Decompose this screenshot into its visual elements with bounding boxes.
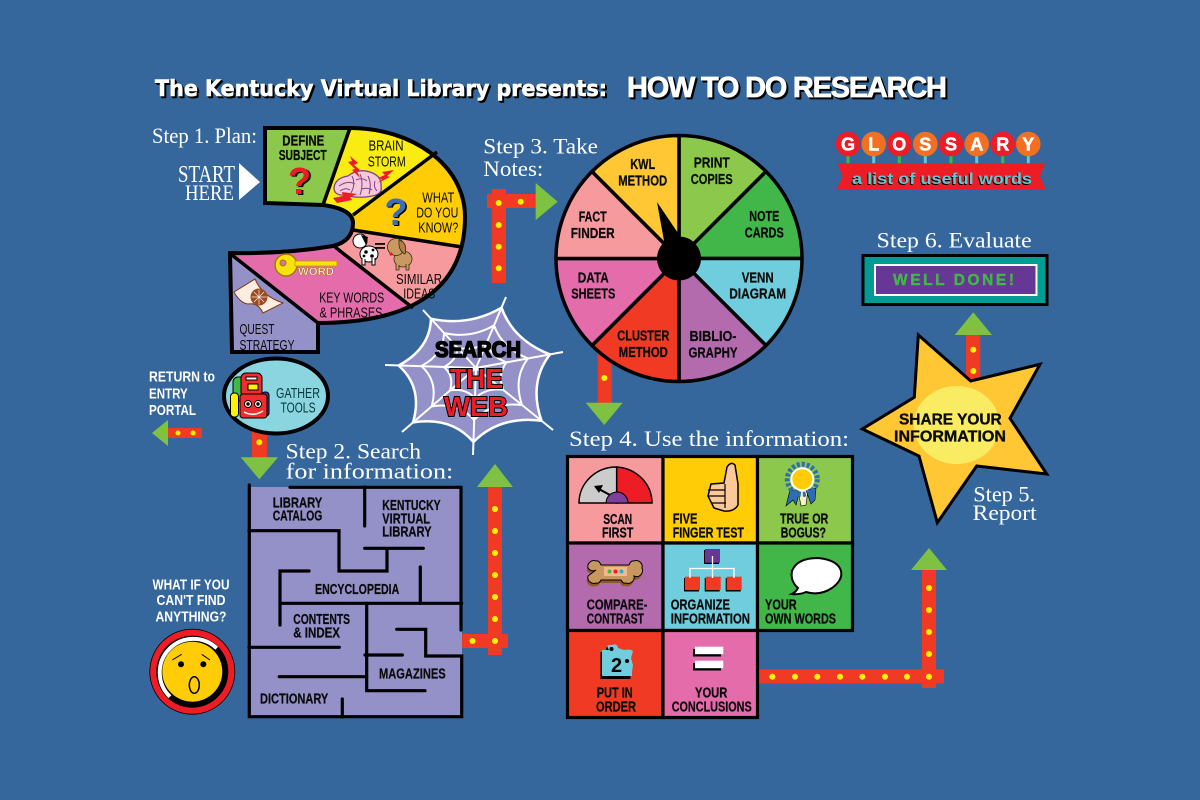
wheel labels: KWL xyxy=(630,157,655,173)
define subject: DEFINE xyxy=(282,133,325,149)
wheel labels: FACT xyxy=(579,209,607,225)
icon: worried face xyxy=(150,629,235,714)
icon: key xyxy=(275,254,337,278)
define subject: SUBJECT xyxy=(279,148,327,164)
maze labels: LIBRARY xyxy=(382,525,432,541)
icon: backpack xyxy=(230,373,269,418)
label: return to entry portal: PORTAL xyxy=(149,403,196,419)
icon: blue question mark: ? xyxy=(386,193,409,235)
key words and phrases xyxy=(319,290,384,322)
wheel labels: SHEETS xyxy=(571,287,616,303)
heading: step 1 plan: Step 1. Plan: xyxy=(152,123,257,148)
scan first: FIRST xyxy=(602,525,633,541)
heading: step 3 take notes xyxy=(483,133,598,181)
label: gather tools xyxy=(276,386,320,417)
similar ideas: SIMILAR xyxy=(396,272,442,288)
arrow: start xyxy=(239,163,260,200)
start here label: START xyxy=(178,162,235,188)
wheel labels: DIAGRAM xyxy=(729,287,786,303)
your conclusions: CONCLUSIONS xyxy=(672,700,752,716)
brain storm xyxy=(368,139,406,171)
icon: puzzle piece: 2 xyxy=(611,655,622,677)
icon: glossary banner: R xyxy=(996,134,1009,154)
heading: step 5 report xyxy=(973,482,1037,525)
icon: glossary banner: Y xyxy=(1022,134,1034,154)
your conclusions: YOUR xyxy=(695,686,728,702)
panel: well done xyxy=(863,256,1047,304)
label: what if you can't find anything: ANYTHING? xyxy=(156,610,227,626)
compare contrast: COMPARE- xyxy=(587,597,648,613)
your own words: YOUR xyxy=(765,597,797,613)
true or bogus: TRUE OR xyxy=(780,511,829,527)
icon: glossary banner: O xyxy=(892,134,906,154)
arrow: share to evaluate xyxy=(955,312,992,385)
maze labels: ENCYCLOPEDIA xyxy=(315,582,400,598)
label: gather tools: TOOLS xyxy=(280,401,316,417)
icon: glossary banner: A xyxy=(970,134,983,154)
icon: search the web xyxy=(385,297,563,455)
arrow: to take notes xyxy=(487,183,558,283)
arrow: gather tools to search xyxy=(241,430,278,479)
heading: step 3 take notes: Notes: xyxy=(483,156,543,181)
maze labels: LIBRARY xyxy=(273,495,323,511)
maze labels: CATALOG xyxy=(273,509,322,525)
icon: glossary banner: a list of useful words xyxy=(852,171,1032,188)
what do you know: KNOW? xyxy=(418,220,458,236)
organize information: ORGANIZE xyxy=(671,597,730,613)
arrow: return to portal xyxy=(152,420,202,446)
icon: glossary banner: S xyxy=(919,134,931,154)
label: what if you can't find anything: CAN'T FIND xyxy=(156,593,226,609)
your own words: OWN WORDS xyxy=(765,611,836,627)
label: gather tools: GATHER xyxy=(276,386,320,402)
heading: step 5 report: Report xyxy=(973,500,1037,525)
your conclusions xyxy=(672,686,752,716)
icon: blue question mark: ? xyxy=(384,192,408,234)
start here label: HERE xyxy=(185,180,234,205)
what do you know xyxy=(416,190,458,236)
wheel labels: COPIES xyxy=(691,172,733,188)
title: HOW TO DO RESEARCH xyxy=(627,72,947,104)
wheel labels: BIBLIO- xyxy=(690,329,737,345)
heading: step 2 search xyxy=(286,438,453,483)
wheel labels: METHOD xyxy=(619,345,668,361)
label: return to entry portal: RETURN to xyxy=(149,370,215,386)
icon: org chart xyxy=(684,549,742,592)
five finger test: FIVE xyxy=(673,511,698,527)
panel: use the information grid xyxy=(568,456,852,718)
panel: search maze xyxy=(249,485,462,717)
compare contrast xyxy=(587,597,648,627)
similar ideas xyxy=(396,272,442,302)
title xyxy=(155,72,947,104)
label: what if you can't find anything xyxy=(152,577,230,626)
what do you know: WHAT xyxy=(422,190,454,206)
panel: share your information star: INFORMATION xyxy=(894,429,1006,446)
true or bogus xyxy=(780,511,829,541)
icon: thumbs up xyxy=(708,463,738,511)
wheel labels: GRAPHY xyxy=(688,345,738,361)
arrow: wheel to use information xyxy=(586,350,623,425)
organize information xyxy=(671,597,750,627)
quest strategy: QUEST xyxy=(240,322,275,338)
wheel labels: DATA xyxy=(578,270,609,286)
icon: key: WORD xyxy=(298,266,334,278)
wheel labels: CARDS xyxy=(745,225,784,241)
label: return to entry portal: ENTRY xyxy=(149,386,188,402)
scan first: SCAN xyxy=(603,512,632,528)
panel: plan track xyxy=(228,126,467,354)
five finger test: FINGER TEST xyxy=(673,525,744,541)
maze labels: MAGAZINES xyxy=(379,666,446,682)
arrow: grid to share xyxy=(759,548,947,688)
icon: dalmatian equals dog xyxy=(353,234,412,270)
heading: step 6 evaluate: Step 6. Evaluate xyxy=(877,227,1032,252)
put in order xyxy=(596,686,636,716)
maze labels: KENTUCKY xyxy=(382,498,441,514)
maze labels: CONTENTS xyxy=(293,612,350,628)
icon: glossary banner xyxy=(836,132,1046,189)
five finger test xyxy=(673,511,744,541)
wheel labels: PRINT xyxy=(694,156,730,172)
icon: search the web: SEARCH xyxy=(435,337,521,362)
panel: well done: WELL DONE! xyxy=(893,272,1014,289)
put in order: ORDER xyxy=(596,700,636,716)
icon: rosette xyxy=(786,464,817,506)
heading: step 3 take notes: Step 3. Take xyxy=(483,133,598,158)
wheel labels: FINDER xyxy=(571,226,615,242)
icon: speech bubble xyxy=(792,558,841,594)
icon: bone xyxy=(587,561,643,586)
icon: glossary banner: L xyxy=(868,134,879,154)
wheel labels: NOTE xyxy=(749,209,780,225)
quest strategy: STRATEGY xyxy=(240,338,295,354)
define subject xyxy=(279,133,327,164)
panel: share your information star: SHARE YOUR xyxy=(899,411,1002,428)
what do you know: DO YOU xyxy=(416,205,458,221)
wheel labels: VENN xyxy=(742,270,774,286)
maze labels: DICTIONARY xyxy=(260,691,329,707)
icon: equals sign xyxy=(693,647,723,670)
label: return to entry portal xyxy=(149,370,215,419)
organize information: INFORMATION xyxy=(671,611,750,627)
title: The Kentucky Virtual Library presents: xyxy=(155,77,607,102)
arrow: maze to web xyxy=(461,464,513,655)
true or bogus: BOGUS? xyxy=(781,525,826,541)
similar ideas: IDEAS xyxy=(403,286,435,302)
icon: gauge xyxy=(579,467,652,503)
icon: glossary banner: G xyxy=(841,134,855,154)
icon: glossary banner: S xyxy=(945,134,957,154)
heading: step 4 use the information: Step 4. Use the information: xyxy=(569,426,849,451)
icon: search the web: THE xyxy=(450,363,503,394)
heading: step 2 search: Step 2. Search xyxy=(286,438,421,463)
icon: red question mark: ? xyxy=(288,161,311,203)
icon: puzzle piece xyxy=(600,644,633,679)
icon: red question mark: ? xyxy=(290,162,313,204)
icon: brain xyxy=(333,156,394,203)
your own words xyxy=(765,597,836,627)
panel: share your information star xyxy=(862,335,1047,523)
maze labels: & INDEX xyxy=(293,626,340,642)
wheel spinner xyxy=(657,202,701,280)
wheel labels xyxy=(571,156,786,361)
scan first xyxy=(602,512,633,541)
wheel labels: CLUSTER xyxy=(617,329,670,345)
brain storm: BRAIN xyxy=(368,139,404,155)
quest strategy xyxy=(240,322,295,354)
key words and phrases: & PHRASES xyxy=(320,306,382,322)
wheel labels: METHOD xyxy=(618,173,667,189)
panel: gather tools xyxy=(224,358,328,434)
put in order: PUT IN xyxy=(597,686,633,702)
label: what if you can't find anything: WHAT IF YOU xyxy=(152,577,230,593)
heading: step 2 search: for information: xyxy=(286,458,453,483)
maze labels xyxy=(260,495,446,707)
heading: step 5 report: Step 5. xyxy=(973,482,1035,507)
icon: map xyxy=(234,279,283,313)
maze labels: VIRTUAL xyxy=(382,511,430,527)
panel: note taking wheel xyxy=(556,135,802,382)
key words and phrases: KEY WORDS xyxy=(319,290,384,306)
start here label xyxy=(178,162,235,205)
brain storm: STORM xyxy=(368,155,406,171)
icon: search the web: WEB xyxy=(444,391,508,422)
compare contrast: CONTRAST xyxy=(587,611,644,627)
